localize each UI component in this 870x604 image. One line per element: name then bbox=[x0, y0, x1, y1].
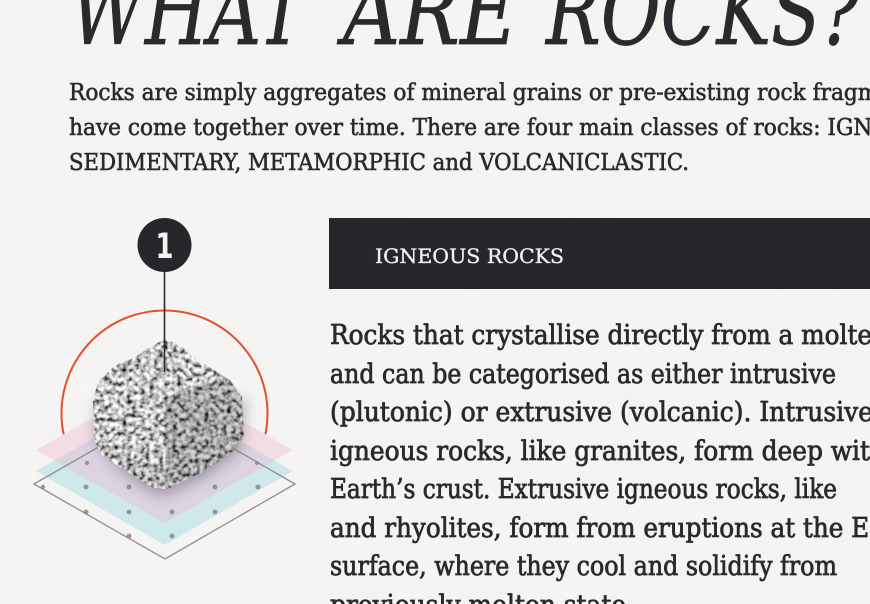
rock cube bbox=[93, 340, 244, 489]
body text: (plutonic) or extrusive (volcanic). Intrusive bbox=[330, 397, 870, 428]
intro paragraph: Rocks are simply aggregates of mineral grains or pre-existing rock fragments bbox=[69, 80, 870, 106]
number badge: 1 bbox=[156, 227, 174, 267]
intro paragraph bbox=[69, 80, 870, 176]
orange arc bbox=[62, 310, 268, 436]
body text bbox=[330, 320, 870, 604]
leader line bbox=[164, 270, 166, 372]
rock shadow bbox=[94, 400, 246, 495]
illustration: igneous rock on layered planes bbox=[34, 218, 295, 559]
layer overlap bbox=[54, 398, 274, 523]
body text: Earth’s crust. Extrusive igneous rocks, like bbox=[330, 474, 837, 505]
pink layer bbox=[36, 377, 293, 523]
body text: surface, where they cool and solidify from bbox=[330, 551, 837, 582]
title bbox=[70, 0, 861, 66]
section header bar bbox=[329, 218, 870, 289]
section header bar: IGNEOUS ROCKS bbox=[375, 244, 564, 268]
body text: Rocks that crystallise directly from a molten bbox=[330, 320, 870, 351]
blue layer bbox=[36, 398, 293, 545]
number badge bbox=[138, 218, 192, 272]
grid dots bbox=[41, 461, 260, 538]
grid outline layer bbox=[34, 409, 295, 559]
body text: and can be categorised as either intrusive bbox=[330, 359, 836, 390]
intro paragraph: SEDIMENTARY, METAMORPHIC and VOLCANICLASTIC. bbox=[69, 150, 689, 176]
